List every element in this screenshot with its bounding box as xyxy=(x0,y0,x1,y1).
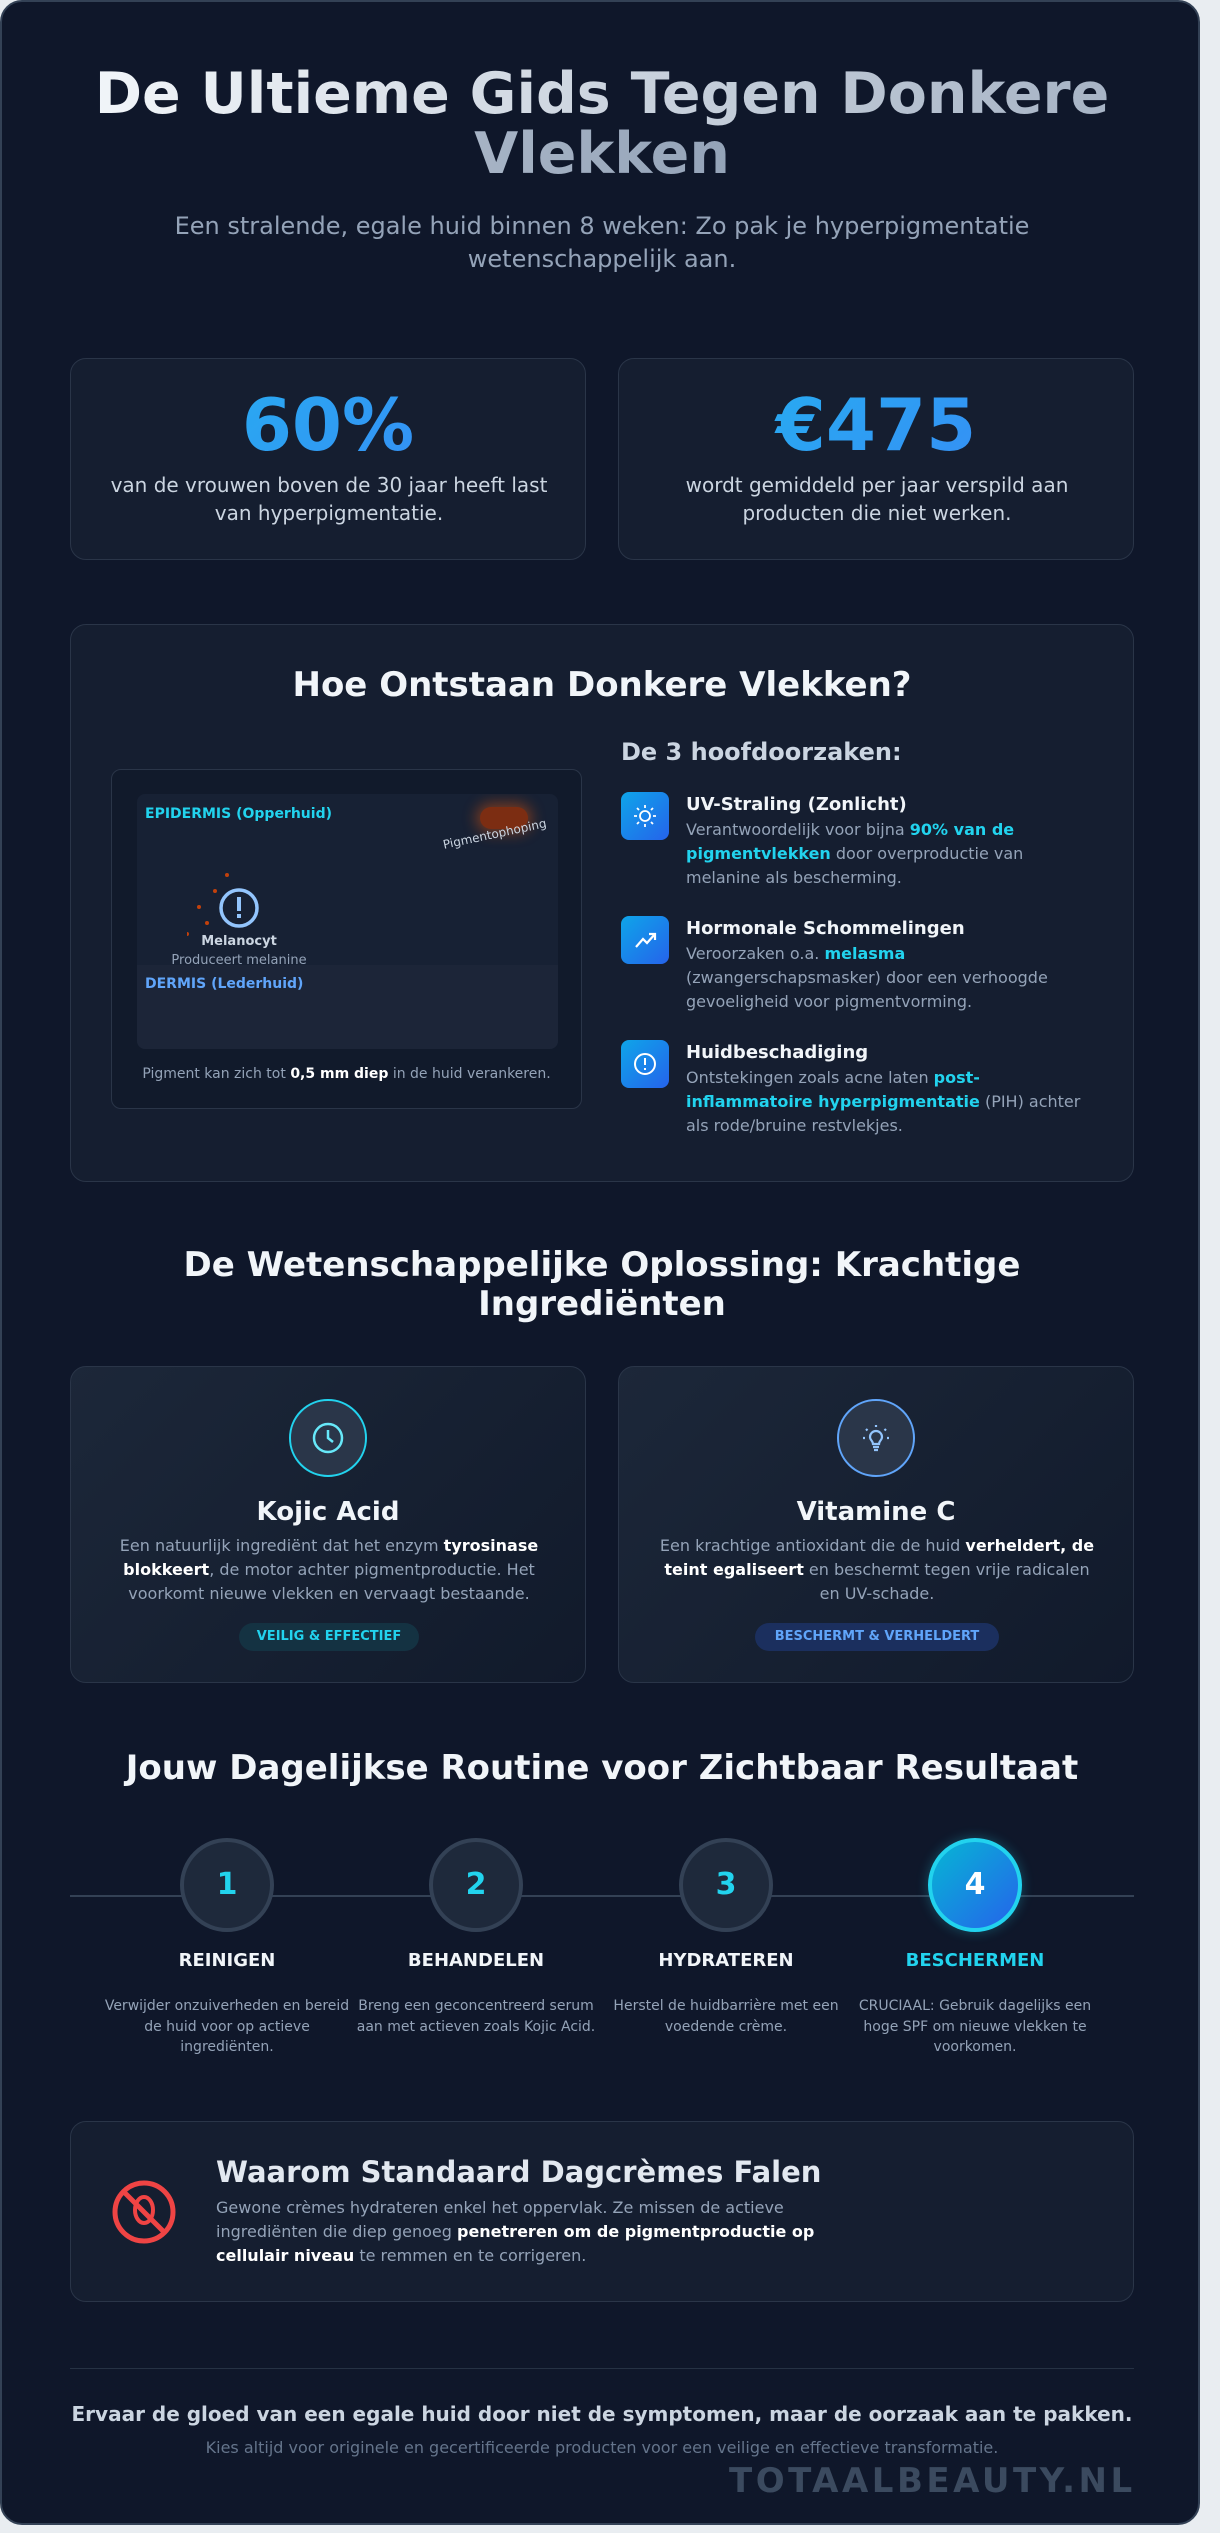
icon: alert xyxy=(621,1040,669,1088)
cause: UV: Verantwoordelijk voor bijna 90% van de pigmentvlekken door overproductie van melanine als bescherming. xyxy=(686,820,1023,887)
heading: 3 causes: De 3 hoofdoorzaken: xyxy=(621,738,902,766)
stat card: €475: €475 xyxy=(776,383,976,467)
cause: UV: UV-Straling (Zonlicht) xyxy=(686,794,907,815)
stat card: 60% xyxy=(70,358,586,560)
step 4: CRUCIAAL: Gebruik dagelijks een hoge SPF om nieuwe vlekken te voorkomen. xyxy=(859,1998,1091,2055)
step 4 xyxy=(859,1832,1091,2055)
heading: routine: Jouw Dagelijkse Routine voor Zichtbaar Resultaat xyxy=(126,1748,1078,1788)
heading: solution: De Wetenschappelijke Oplossing: Krachtige Ingrediënten xyxy=(184,1245,1020,1324)
label: dermis: DERMIS (Lederhuid) xyxy=(145,976,303,992)
step 3: 3 xyxy=(716,1867,736,1902)
step 2: 2 xyxy=(466,1867,486,1902)
badge xyxy=(755,1623,999,1651)
panel: kojic acid xyxy=(70,1366,586,1683)
panel: warning: Waarom Standaard Dagcrèmes Falen xyxy=(216,2155,821,2189)
title: De Ultieme Gids Tegen Donkere xyxy=(95,61,1109,127)
skin layers xyxy=(137,794,558,1049)
panel: vitamine c: Een krachtige antioxidant die de huid verheldert, de teint egaliseert en beschermt tegen vrije radicalen en UV-schade. xyxy=(660,1536,1094,1603)
step 4: BESCHERMEN xyxy=(906,1950,1044,1971)
step 3: HYDRATEREN xyxy=(658,1950,794,1971)
step 2: BEHANDELEN xyxy=(408,1950,544,1971)
step 2: Breng een geconcentreerd serum aan met actieven zoals Kojic Acid. xyxy=(357,1998,595,2034)
panel: vitamine c: Vitamine C xyxy=(797,1497,955,1527)
icon: trend xyxy=(621,916,669,964)
label: epidermis: EPIDERMIS (Opperhuid) xyxy=(145,806,332,822)
step 1: REINIGEN xyxy=(179,1950,275,1971)
cause: hormones xyxy=(686,918,1048,1011)
panel: kojic acid: Een natuurlijk ingrediënt dat het enzym tyrosinase blokkeert, de motor achter pigmentproductie. Het voorkomt nieuwe vlekken en vervaagt bestaande. xyxy=(120,1536,538,1603)
cause: damage: Huidbeschadiging xyxy=(686,1042,868,1063)
cause: damage: Ontstekingen zoals acne laten post-inflammatoire hyperpigmentatie (PIH) achter als rode/bruine restvlekjes. xyxy=(686,1068,1080,1135)
step 4: 4 xyxy=(965,1867,985,1902)
icon: forbidden xyxy=(112,2180,176,2244)
stat card: €475: wordt gemiddeld per jaar verspild aan producten die niet werken. xyxy=(686,473,1068,525)
badge xyxy=(239,1623,419,1651)
badge: BESCHERMT & VERHELDERT xyxy=(775,1629,979,1644)
badge: VEILIG & EFFECTIEF xyxy=(257,1629,401,1644)
stat card: €475 xyxy=(618,358,1134,560)
icon: clock xyxy=(289,1399,367,1477)
skin diagram xyxy=(111,769,582,1109)
pigment blob xyxy=(480,807,528,829)
panel: causes xyxy=(70,624,1134,1182)
subtitle: Een stralende, egale huid binnen 8 weken: Zo pak je hyperpigmentatie wetenschappelijk aan. xyxy=(175,212,1029,273)
step 2 xyxy=(357,1838,595,2034)
step 3 xyxy=(613,1838,839,2034)
step 1: Verwijder onzuiverheden en bereid de huid voor op actieve ingrediënten. xyxy=(105,1998,349,2055)
title: Vlekken xyxy=(474,121,730,187)
step 1: 1 xyxy=(217,1867,237,1902)
footer text: Ervaar de gloed van een egale huid door niet de symptomen, maar de oorzaak aan te pakken. xyxy=(72,2402,1132,2426)
step 3: Herstel de huidbarrière met een voedende crème. xyxy=(613,1998,839,2034)
label: pigmentophoping: Pigmentophoping xyxy=(442,816,548,852)
stat card: 60%: 60% xyxy=(242,383,414,467)
icon: bulb xyxy=(837,1399,915,1477)
main card: Kies altijd voor originele en gecertificeerde producten voor een veilige en effectieve transformatie. xyxy=(206,2438,998,2457)
cause: hormones: (zwangerschapsmasker) door een verhoogde gevoeligheid voor pigmentvorming. xyxy=(686,968,1048,1011)
step 1 xyxy=(105,1838,349,2055)
title xyxy=(95,61,1109,187)
panel: kojic acid: Kojic Acid xyxy=(257,1497,399,1527)
panel: vitamine c xyxy=(618,1366,1134,1683)
panel: warning: Gewone crèmes hydrateren enkel het oppervlak. Ze missen de actieve ingrediënten die diep genoeg penetreren om de pigmentproductie op cellulair niveau te remmen en te corrigeren. xyxy=(216,2198,814,2265)
cause: hormones: Veroorzaken o.a. melasma xyxy=(686,944,905,963)
caption: Pigment kan zich tot 0,5 mm diep in de huid verankeren. xyxy=(142,1066,551,1082)
skin layers: Produceert melanine xyxy=(171,953,307,968)
stat card: 60%: van de vrouwen boven de 30 jaar heeft last van hyperpigmentatie. xyxy=(111,473,547,525)
panel: warning xyxy=(70,2121,1134,2302)
cause: hormones: Hormonale Schommelingen xyxy=(686,918,965,939)
label: melanocyt: Melanocyt xyxy=(201,934,277,949)
timeline xyxy=(70,1832,1134,2055)
heading: causes: Hoe Ontstaan Donkere Vlekken? xyxy=(292,665,912,705)
icon: sun xyxy=(621,792,669,840)
icon: melanocyte xyxy=(187,873,259,936)
watermark: TOTAALBEAUTY.NL xyxy=(729,2461,1136,2501)
